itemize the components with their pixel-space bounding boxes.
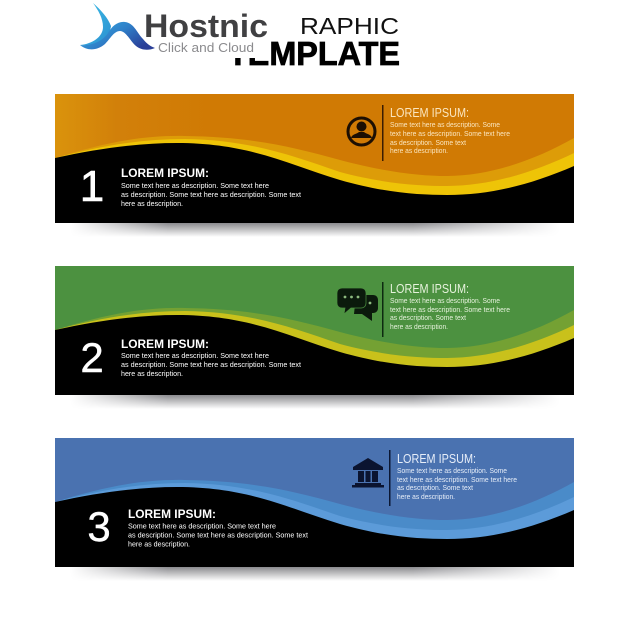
logo wordmark: Hostnic xyxy=(144,8,268,44)
left text block: LOREM IPSUM: xyxy=(128,507,216,521)
right text block: LOREM IPSUM: xyxy=(390,281,469,296)
inner wave band xyxy=(55,311,574,395)
panel 3: blue banner xyxy=(55,438,574,581)
banner shadow xyxy=(77,223,550,236)
left text block xyxy=(121,166,302,208)
left text block: as description. Some text here as description. Some text xyxy=(128,530,309,540)
right text block: text here as description. Some text here xyxy=(397,475,517,484)
banner background xyxy=(55,266,574,395)
icon: person in circle xyxy=(348,118,375,145)
right text block: Some text here as description. Some xyxy=(397,466,507,475)
title: infographic template: INFOGRAPHIC xyxy=(217,13,399,39)
right text block xyxy=(397,451,517,501)
title: infographic template xyxy=(205,0,400,72)
left text block: as description. Some text here as description. Some text xyxy=(121,360,302,369)
number 2: 2 xyxy=(80,334,104,381)
right text block: LOREM IPSUM: xyxy=(397,451,476,466)
logo tagline: Click and Cloud xyxy=(158,41,254,55)
banner shadow xyxy=(77,395,550,408)
left text block: here as description. xyxy=(128,540,190,548)
inner wave band xyxy=(55,483,574,567)
number 3: 3 xyxy=(87,503,111,550)
left text block: as description. Some text here as description. Some text xyxy=(121,190,302,199)
right text block xyxy=(390,105,510,155)
inner wave band xyxy=(55,139,574,223)
right text block: text here as description. Some text here xyxy=(390,305,510,314)
left text block xyxy=(121,337,302,378)
right text block: here as description. xyxy=(390,146,448,155)
black wave xyxy=(55,315,574,395)
logo: Hostnic xyxy=(80,3,268,55)
left text block: Some text here as description. Some text here xyxy=(121,351,269,360)
outer wave band xyxy=(55,308,574,395)
number 1: 1 xyxy=(80,162,104,211)
right text block: as description. Some text xyxy=(390,138,467,147)
banner shadow xyxy=(77,567,550,580)
left text block: Some text here as description. Some text here xyxy=(128,522,276,530)
icon: bank building xyxy=(352,458,384,488)
right text block: as description. Some text xyxy=(397,483,474,492)
right text block: as description. Some text xyxy=(390,313,467,322)
right text block xyxy=(390,281,510,331)
left text block xyxy=(128,507,309,548)
right text block: here as description. xyxy=(390,322,448,331)
left text block: LOREM IPSUM: xyxy=(121,166,209,180)
panel 1: orange banner xyxy=(55,94,574,237)
divider xyxy=(389,450,390,506)
title: infographic template: TEMPLATE xyxy=(228,35,400,72)
left text block: here as description. xyxy=(121,369,183,378)
divider xyxy=(382,105,384,161)
black wave xyxy=(55,143,574,223)
left text block: here as description. xyxy=(121,199,183,208)
outer wave band xyxy=(55,136,574,223)
panel 2: green banner xyxy=(55,266,574,409)
right text block: text here as description. Some text here xyxy=(390,129,510,138)
outer wave band xyxy=(55,480,574,567)
left text block: LOREM IPSUM: xyxy=(121,337,209,351)
right text block: LOREM IPSUM: xyxy=(390,105,469,120)
right text block: Some text here as description. Some xyxy=(390,120,500,129)
icon: logo bird xyxy=(80,3,155,50)
left text block: Some text here as description. Some text here xyxy=(121,181,269,190)
divider xyxy=(382,282,384,337)
icon: chat bubbles xyxy=(337,288,378,321)
banner background xyxy=(55,94,574,223)
black wave xyxy=(55,487,574,567)
banner background xyxy=(55,438,574,567)
right text block: here as description. xyxy=(397,492,455,501)
right text block: Some text here as description. Some xyxy=(390,296,500,305)
